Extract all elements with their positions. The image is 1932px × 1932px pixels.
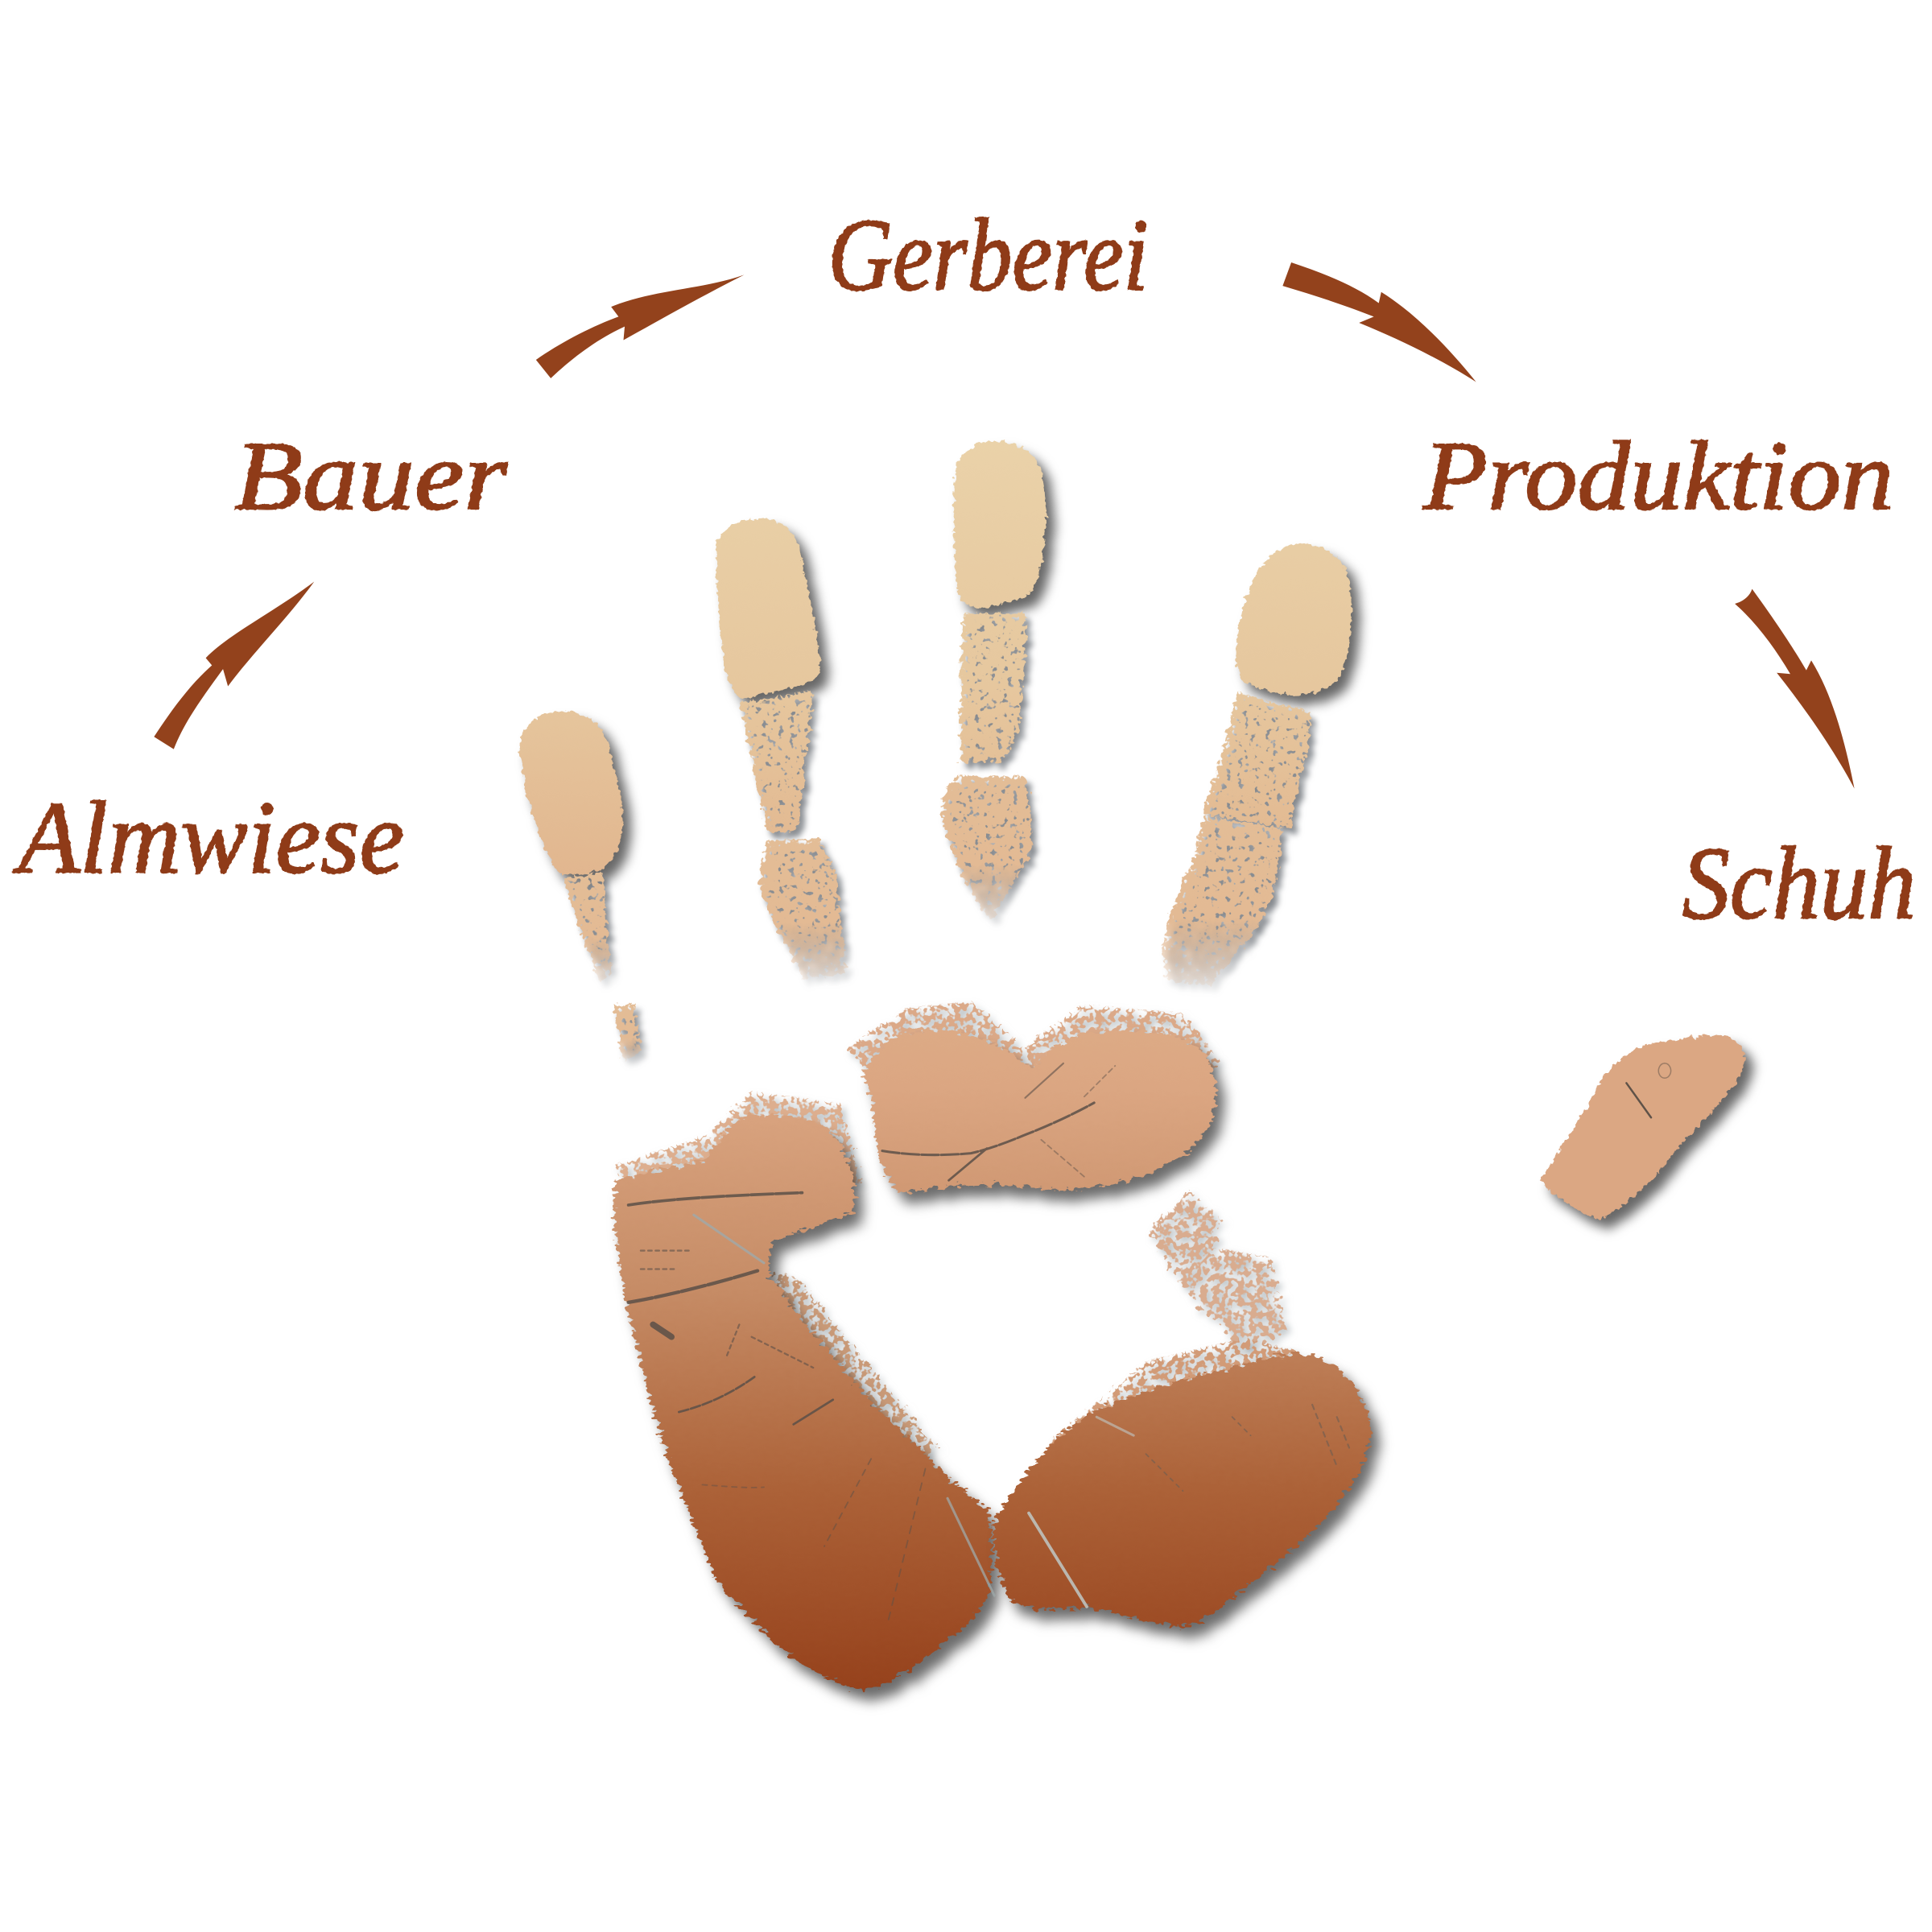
palm: thumb base pad [993, 1354, 1372, 1626]
palm: upper pad [848, 1001, 1220, 1191]
label: Produktion: Produktion [1422, 422, 1894, 530]
palm: thumb base upper wisp [1047, 1189, 1294, 1466]
label: Bauer: Bauer [234, 422, 508, 530]
label: Schuh: Schuh [1682, 825, 1916, 940]
ring finger [716, 518, 845, 980]
handprint [519, 441, 1744, 1690]
thumb print [1540, 1034, 1744, 1220]
label: Almwiese: Almwiese [12, 780, 404, 895]
label: Gerberei: Gerberei [828, 197, 1149, 312]
index finger [1164, 543, 1352, 985]
middle finger [941, 441, 1046, 922]
arrow: Produktion to Schuh [1735, 589, 1855, 789]
pinky finger [519, 711, 641, 1059]
arrow: Almwiese to Bauer [154, 581, 314, 749]
arrow: Gerberei to Produktion [1282, 262, 1476, 382]
arrow: Bauer to Gerberei [536, 275, 744, 378]
palm: left heel and outer edge [614, 1091, 994, 1690]
